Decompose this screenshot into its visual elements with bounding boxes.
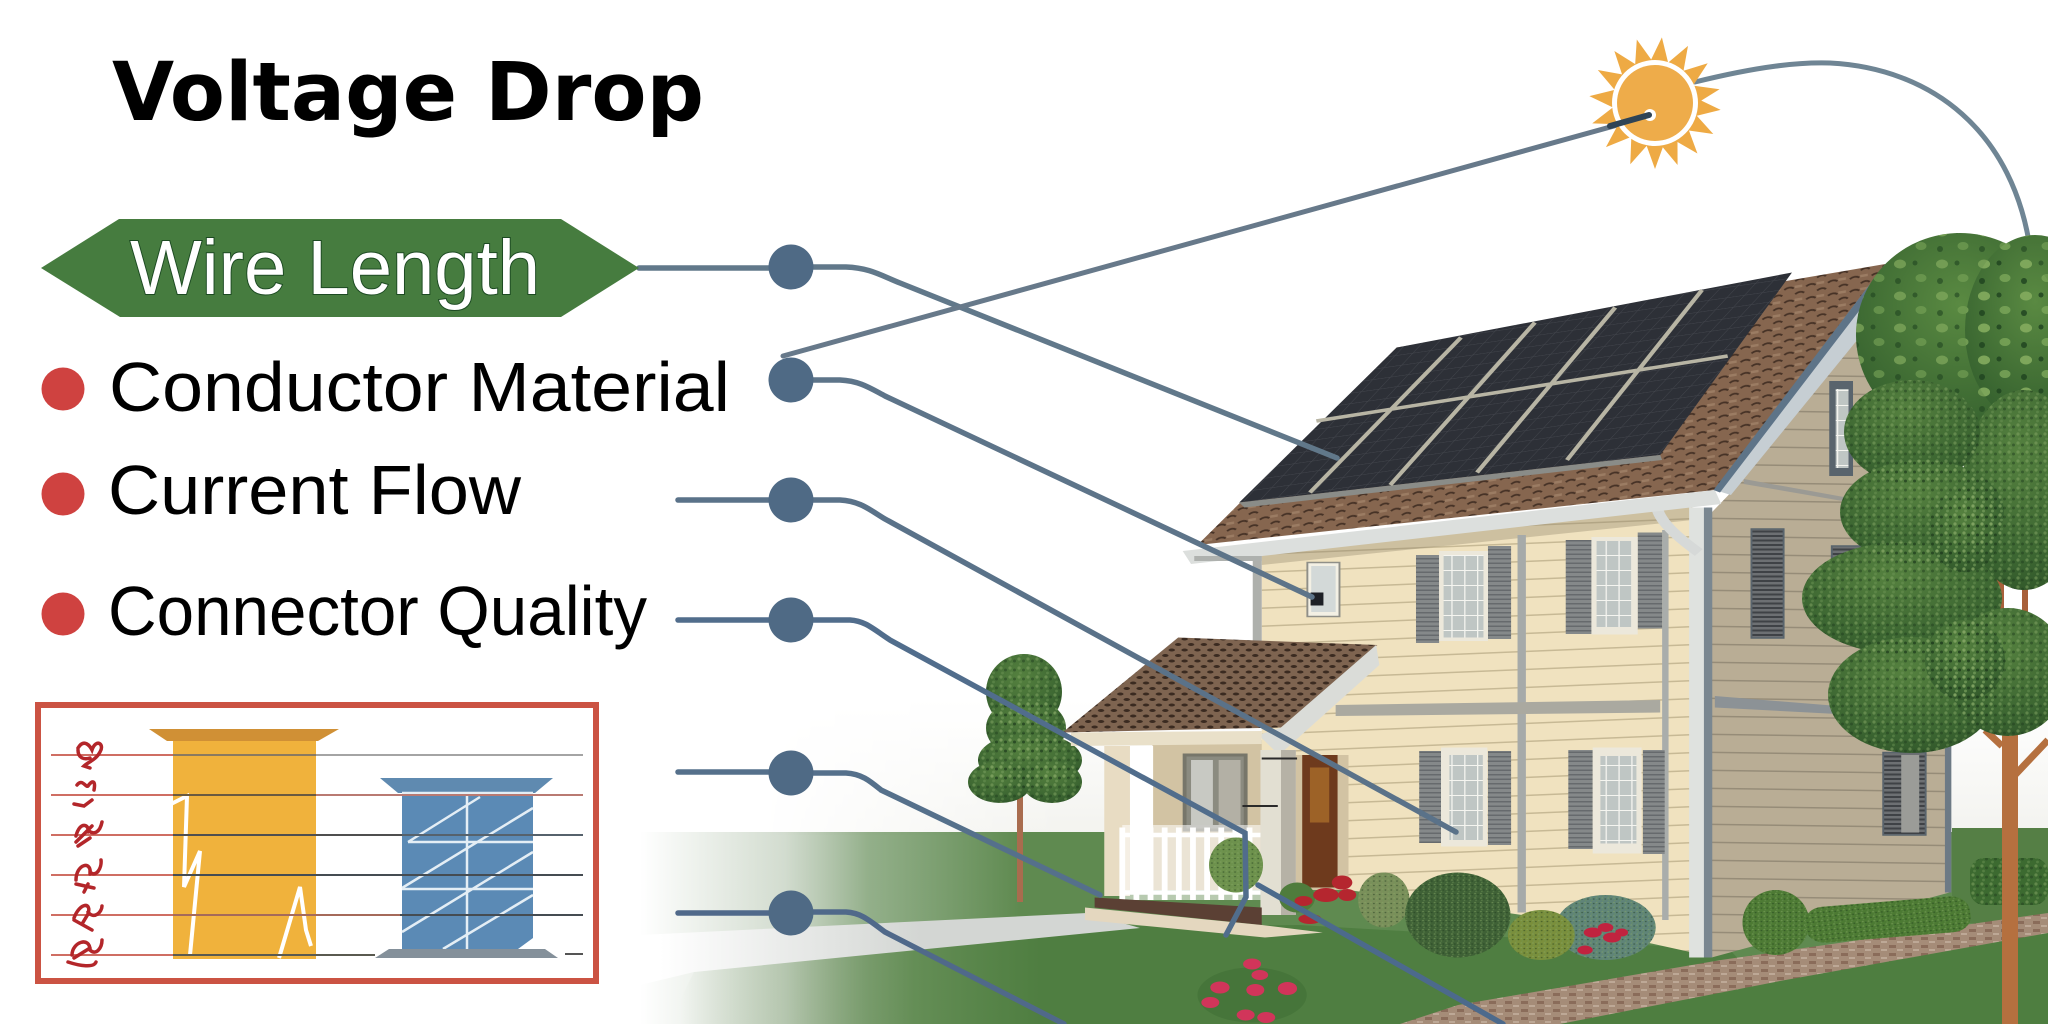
front wall [1262,505,1692,952]
solar panels [1239,272,1792,508]
line: wire length to solar panel [639,267,1337,458]
front wall trim [1253,508,1712,958]
gutter and rake [1183,264,1901,564]
left tree [968,654,1082,902]
list item: conductor material: Conductor Material [109,348,730,426]
title: Voltage Drop [112,46,704,140]
banner: wire length [41,219,639,317]
house [1062,264,1973,1023]
lower right window [1568,748,1665,854]
bar: blue conductor [375,778,558,958]
bar: gold conductor [149,729,339,959]
connector node dots [768,244,814,936]
garbled red axis marks [68,743,102,966]
lower centre window [1419,748,1511,846]
line: lower front yard run [1258,885,1503,1024]
icon: sun [1588,36,1722,169]
line: sun arc [1695,63,2031,255]
side wall [1712,288,1949,958]
side wall trim and windows [1715,381,1951,892]
line: fifth connector to porch base [678,772,1100,895]
sky haze [920,768,2048,832]
eave shadow [1262,505,1692,565]
panel: bar chart comparison [38,705,596,981]
upper right window [1566,532,1662,634]
line: sixth connector to lawn [678,912,1064,1024]
list item: current flow: Current Flow [108,451,521,529]
shrubs and flowers [1197,838,1973,1023]
porch back wall [1152,740,1352,890]
connector lines [639,63,2031,1024]
banner: wire length: Wire Length [130,225,540,311]
list item: connector quality: Connector Quality [108,572,647,650]
upper centre window [1416,546,1511,643]
line: conductor material to small window [813,380,1312,597]
line: connector quality to porch [678,620,1246,935]
upper small window with dark connector box [1307,562,1339,616]
right tree [1802,233,2048,1024]
ground: lawn, walkway and brick path [640,828,2048,1024]
main roof [1197,264,1885,545]
porch [1062,638,1379,938]
line: current flow to lower window [678,500,1456,832]
line: to sun [783,116,1650,356]
chart gridlines [51,755,583,955]
